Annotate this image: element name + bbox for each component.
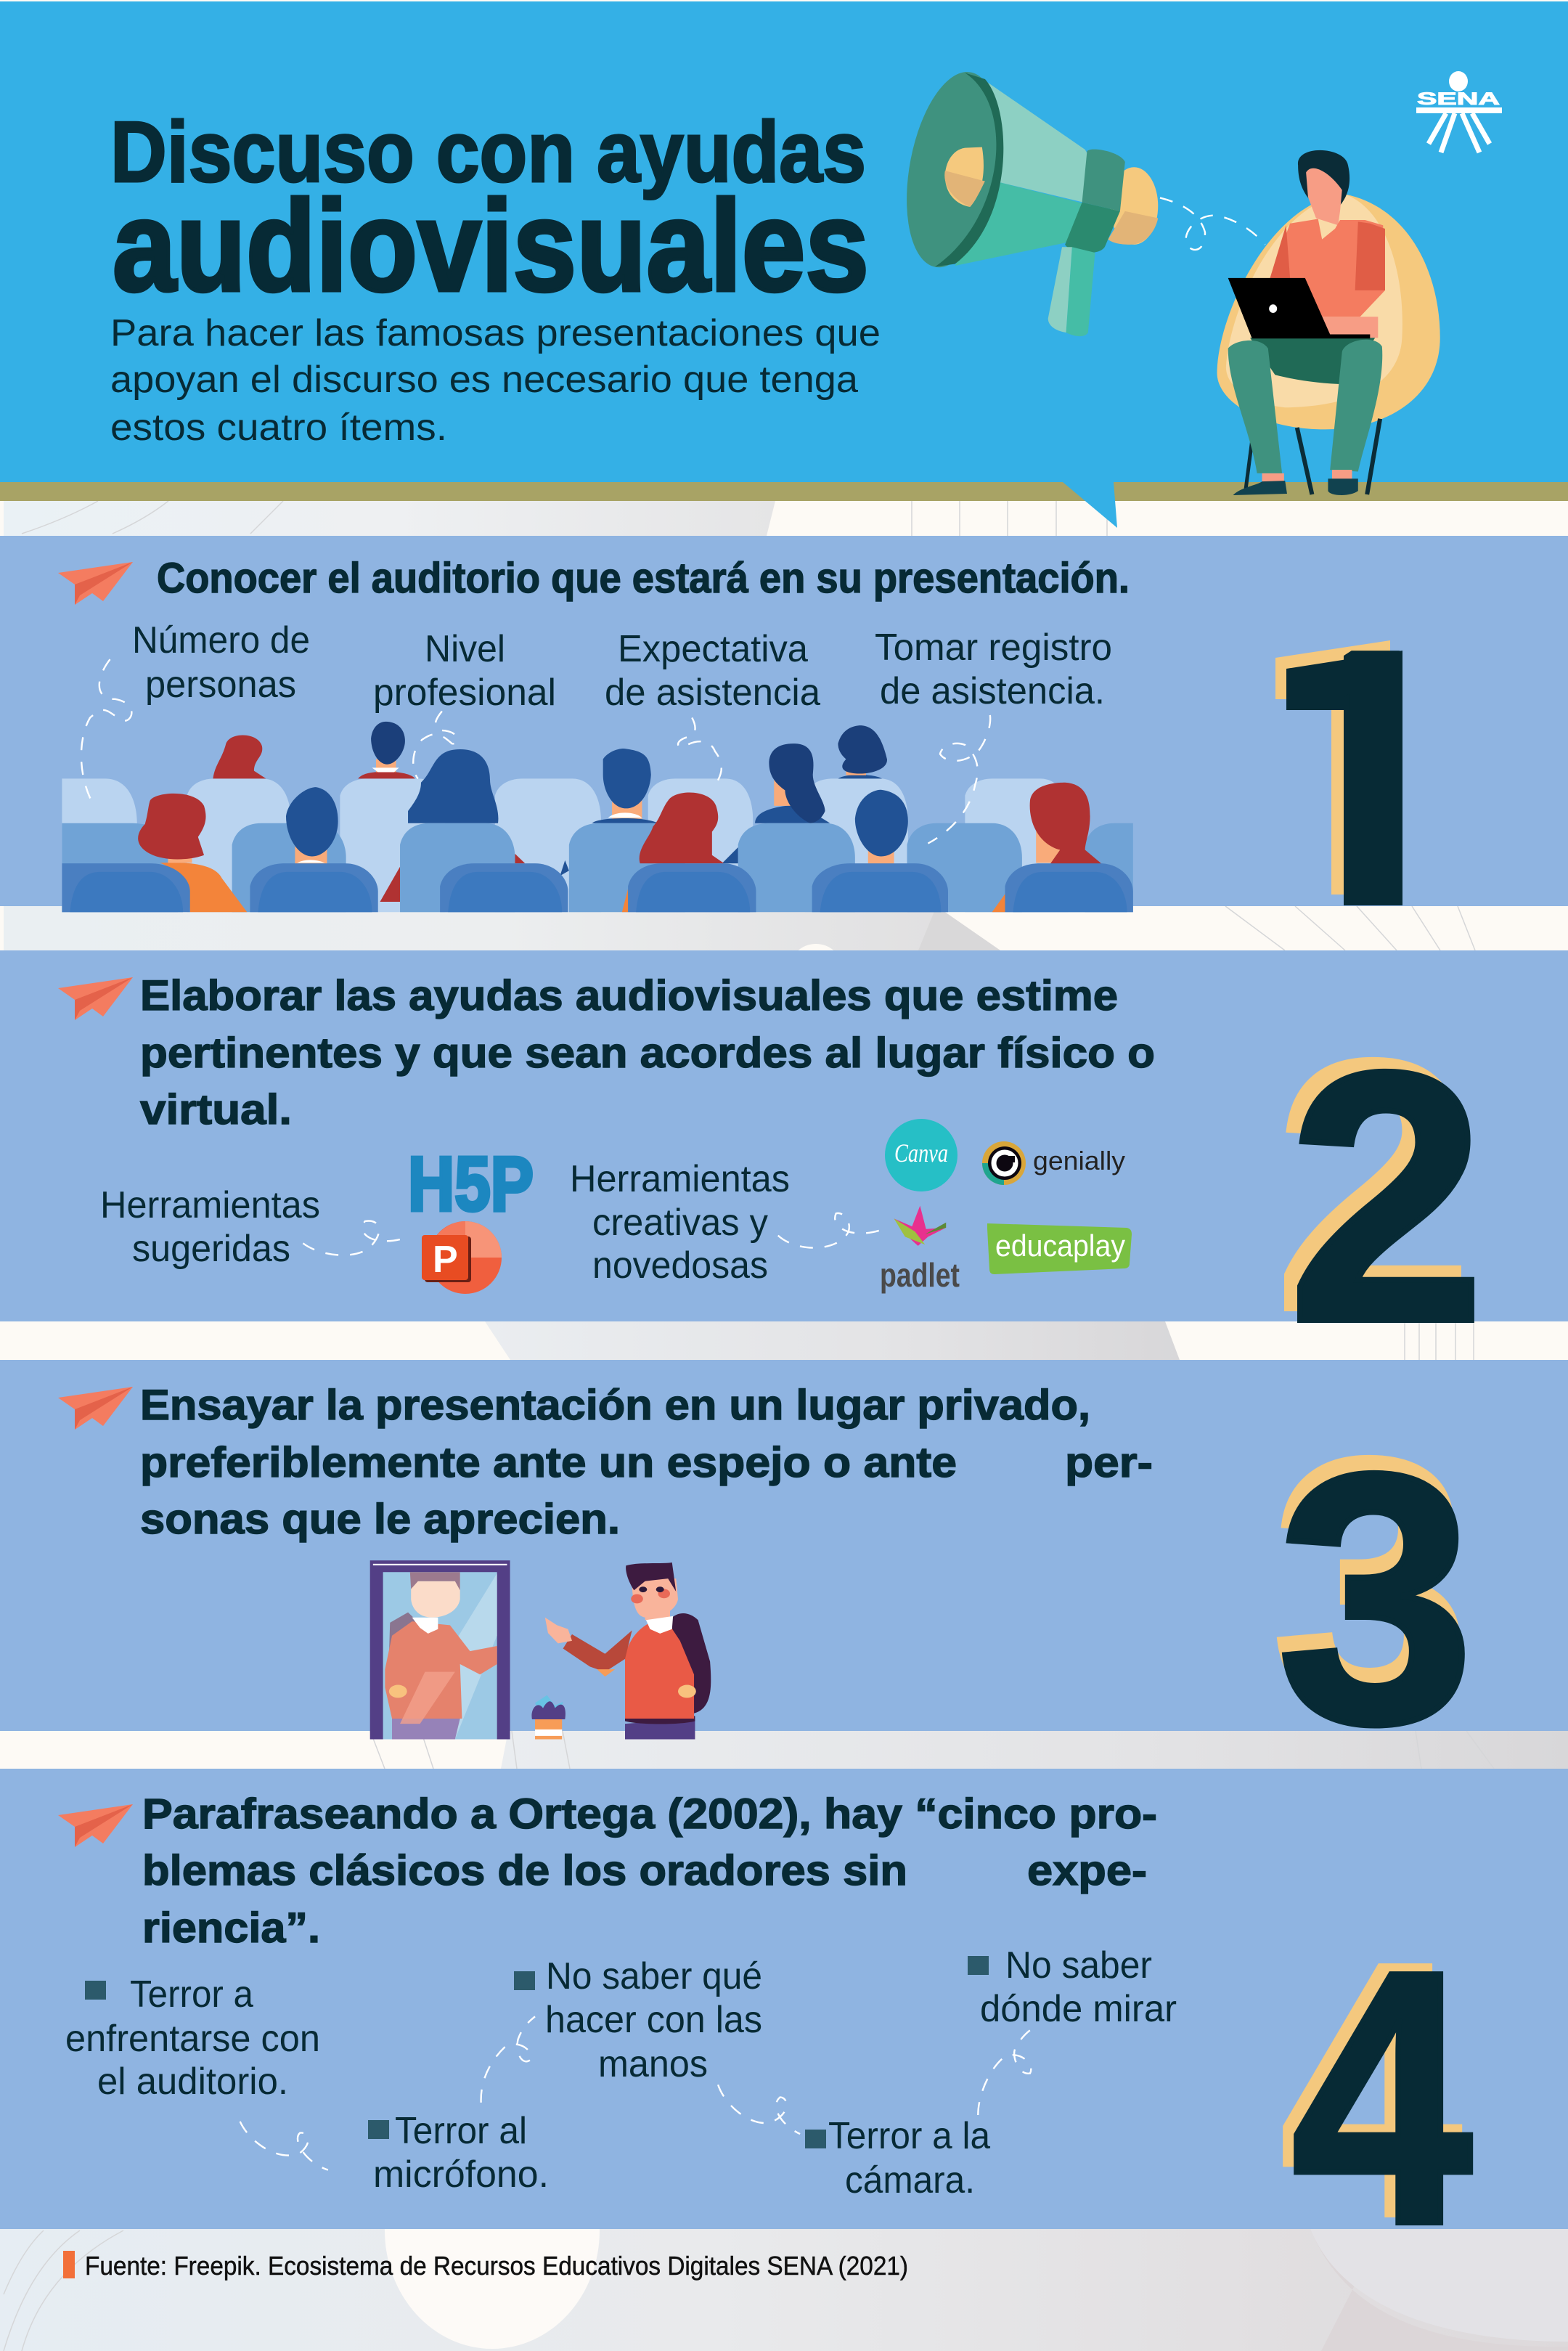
- logo: educaplay: [987, 1223, 1132, 1274]
- logo: Canva: [885, 1119, 957, 1191]
- logo: genially: [982, 1141, 1125, 1185]
- panel 3 heading: Ensayar la presentación en un lugar privado,: [140, 1382, 1090, 1429]
- panel 1: [0, 536, 1568, 912]
- dashed connectors panel 1: [81, 659, 990, 844]
- problem: terror al auditorio: Terror a: [130, 1973, 253, 2016]
- intro text: [110, 312, 881, 449]
- panel 1 labels: personas: [145, 664, 296, 706]
- panel 4 heading: Parafraseando a Ortega (2002), hay “cinco pro-: [142, 1790, 1157, 1838]
- logo: educaplay: educaplay: [995, 1229, 1125, 1263]
- panel 4 number: 4: [1281, 1888, 1463, 2291]
- mirror: [370, 1560, 510, 1740]
- panel 3 heading: per-: [1065, 1439, 1153, 1486]
- panel 2 heading: virtual.: [140, 1086, 292, 1133]
- panel 1 labels: Tomar registro: [875, 627, 1112, 669]
- audience illustration: [62, 722, 1133, 912]
- title: Discuso con ayudas: [110, 104, 866, 200]
- panel 1 heading: Conocer el auditorio que estará en su presentación.: [157, 555, 1130, 602]
- dashed connectors panel 2: [303, 1213, 880, 1255]
- panel 1 labels: [132, 619, 1112, 714]
- panel 4: [0, 1769, 1568, 2299]
- problem: manos: [514, 1955, 762, 2085]
- panel: header background: [0, 1, 1568, 528]
- problem: terror al auditorio: [65, 1973, 320, 2103]
- logo: genially: genially: [1033, 1146, 1125, 1176]
- logo: PowerPoint: P: [433, 1239, 458, 1281]
- panel 2 heading: [140, 972, 1155, 1133]
- label: herramientas creativas: novedosas: [592, 1244, 768, 1287]
- problem: terror al auditorio: enfrentarse con: [65, 2018, 320, 2060]
- title: audiovisuales: [113, 174, 869, 318]
- paper plane icon: [58, 1804, 133, 1847]
- problem: dónde mirar: dónde mirar: [980, 1988, 1177, 2030]
- dashed connectors panel 4: [240, 2016, 1033, 2170]
- paper plane icon: [58, 977, 133, 1020]
- intro text: apoyan el discurso es necesario que tenga: [110, 359, 858, 401]
- source note: Fuente: Freepik. Ecosistema de Recursos Educativos Digitales SENA (2021): [85, 2251, 908, 2281]
- panel 3 number: 3: [1272, 1384, 1470, 1782]
- logo: PowerPoint: [422, 1221, 502, 1294]
- problem: terror al auditorio: el auditorio.: [97, 2061, 288, 2103]
- logo: padlet: [880, 1206, 960, 1294]
- panel 4 number: 4: [1291, 1896, 1474, 2299]
- panel 3 heading: [140, 1382, 1153, 1543]
- problem: cámara: Terror a la: [828, 2115, 990, 2157]
- panel 1 labels: de asistencia: [605, 672, 820, 714]
- paper plane icon: [58, 562, 133, 605]
- intro text: Para hacer las famosas presentaciones que: [110, 312, 881, 354]
- intro text: estos cuatro ítems.: [110, 407, 447, 449]
- panel 2: [0, 950, 1568, 1395]
- problem: dónde mirar: [968, 1944, 1177, 2030]
- panel 3 heading: preferiblemente ante un espejo o ante: [140, 1439, 957, 1486]
- icon: megaphone: [894, 71, 1158, 336]
- plant pot: [531, 1695, 565, 1740]
- label: herramientas creativas: Herramientas: [570, 1158, 790, 1200]
- panel 4 heading: riencia”.: [142, 1904, 320, 1952]
- panel 1 labels: Nivel: [425, 628, 505, 670]
- panel 1 labels: profesional: [373, 672, 556, 714]
- panel 1 labels: Número de: [132, 619, 310, 661]
- label: herramientas sugeridas: [100, 1184, 320, 1270]
- panel 2 number: 2: [1275, 986, 1473, 1384]
- panel 1 number: [1275, 640, 1402, 905]
- problem: manos: manos: [598, 2043, 708, 2085]
- panel 2 number: 2: [1288, 998, 1486, 1395]
- problem: micrófono: [368, 2110, 549, 2196]
- label: herramientas creativas: [570, 1158, 790, 1287]
- problem: micrófono: micrófono.: [373, 2154, 549, 2196]
- panel 4 heading: [142, 1790, 1157, 1952]
- logo: padlet: padlet: [880, 1256, 960, 1294]
- problem: dónde mirar: No saber: [1005, 1944, 1152, 1987]
- problem: micrófono: Terror al: [395, 2110, 527, 2152]
- paper plane icon: [58, 1387, 133, 1430]
- logo: Canva: Canva: [894, 1138, 948, 1168]
- illustration: person at mirror: [370, 1560, 711, 1740]
- illustration: person on chair: [1217, 150, 1440, 495]
- panel 1 number: 1: [1262, 571, 1469, 985]
- person: [545, 1562, 711, 1740]
- panel 3 number: 3: [1277, 1399, 1475, 1797]
- label: herramientas sugeridas: Herramientas: [100, 1184, 320, 1226]
- problem: manos: hacer con las: [545, 1999, 762, 2041]
- icon: SENA logo: SENA: [1417, 89, 1500, 109]
- panel 4 heading: expe-: [1027, 1847, 1147, 1894]
- problem: manos: No saber qué: [546, 1955, 762, 1997]
- dashed sound line: [1160, 197, 1265, 250]
- title: [110, 104, 869, 318]
- problem: cámara: cámara.: [845, 2159, 975, 2201]
- label: herramientas sugeridas: sugeridas: [132, 1228, 290, 1270]
- panel 3 heading: sonas que le aprecien.: [140, 1496, 620, 1543]
- panel 1 labels: Expectativa: [618, 628, 808, 670]
- icon: SENA logo: [1416, 71, 1502, 152]
- problem: cámara: [805, 2115, 990, 2201]
- label: herramientas creativas: creativas y: [592, 1202, 768, 1244]
- panel 2 heading: Elaborar las ayudas audiovisuales que estime: [140, 972, 1118, 1019]
- panel 2 heading: pertinentes y que sean acordes al lugar físico o: [140, 1030, 1155, 1077]
- panel 1 labels: de asistencia.: [880, 670, 1105, 712]
- logo: H5P: H5P: [408, 1141, 534, 1227]
- panel 3: [0, 1360, 1568, 1797]
- panel 4 heading: blemas clásicos de los oradores sin: [142, 1847, 907, 1894]
